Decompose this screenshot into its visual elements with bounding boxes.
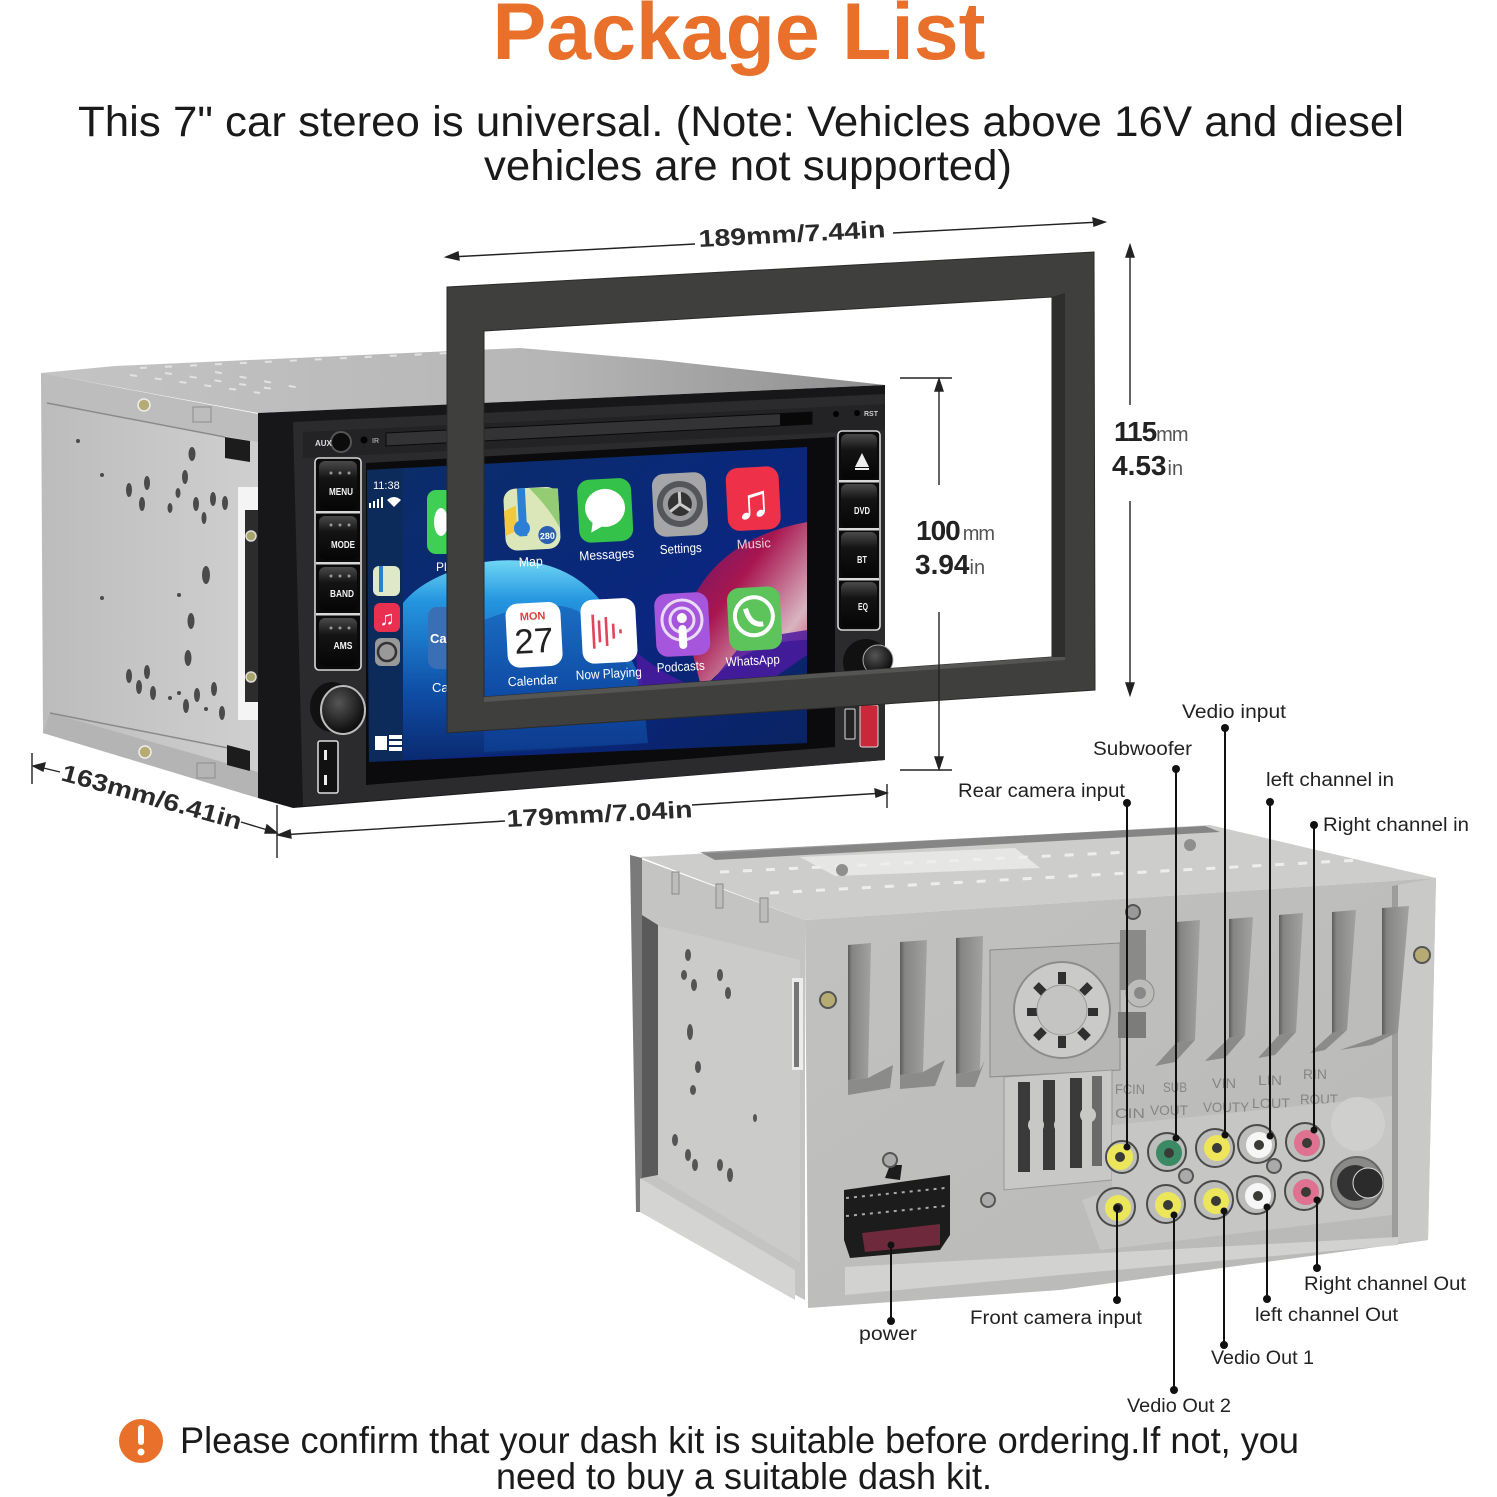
app: calendar: MON — [519, 610, 546, 624]
app: now playing — [580, 597, 638, 664]
app: calendar — [505, 601, 563, 668]
app: map: 280 — [540, 531, 555, 541]
dimension: frame height — [1112, 245, 1188, 695]
front faceplate — [258, 385, 885, 808]
vent block — [1004, 1070, 1112, 1190]
app: music — [725, 466, 781, 531]
dimension: opening height: 100mm — [916, 515, 994, 546]
app labels: Now Playing — [575, 664, 642, 683]
subtitle text block — [78, 98, 1404, 190]
rear view: stereo chassis — [630, 825, 1436, 1308]
callout: power — [859, 1242, 918, 1345]
callout: vedio input — [1182, 702, 1287, 1138]
bottom note: need to buy a suitable dash kit. — [496, 1456, 992, 1497]
dimension: frame height: 4.53in — [1112, 450, 1183, 481]
callout: vedio out 1: Vedio Out 1 — [1211, 1348, 1314, 1369]
front view: car stereo unit — [41, 348, 893, 808]
screen recess — [366, 437, 835, 785]
sidebar app icons: ♫ — [380, 608, 394, 630]
right USB port and knob base — [843, 639, 893, 747]
left control buttons: MODE — [331, 540, 355, 551]
status bar — [369, 480, 401, 508]
ventilation slots — [848, 906, 1409, 1095]
port block backing — [1082, 1096, 1392, 1250]
chassis back plate — [805, 878, 1436, 1308]
callout: subwoofer: Subwoofer — [1093, 739, 1193, 760]
unit side panel with mounting holes — [41, 373, 258, 798]
callout: right channel out: Right channel Out — [1304, 1274, 1467, 1295]
app labels — [507, 535, 780, 689]
AUX jack — [315, 410, 879, 452]
partially hidden apps: Pl — [436, 560, 447, 574]
callout: left channel in — [1266, 770, 1394, 1140]
app labels: Podcasts — [656, 658, 706, 675]
CD slot — [386, 412, 812, 446]
left control buttons: MENU — [329, 487, 353, 498]
app: messages — [577, 478, 634, 543]
callout: right channel out — [1304, 1196, 1467, 1295]
embossed port labels: RIN — [1303, 1066, 1327, 1082]
callout: rear camera input: Rear camera input — [958, 781, 1126, 802]
icon: warning — [119, 1419, 163, 1463]
carplay app icons — [498, 466, 788, 689]
callout: right channel in — [1310, 815, 1469, 1134]
screen wallpaper shapes — [403, 560, 648, 760]
callout: left channel in: left channel in — [1266, 770, 1394, 791]
AUX jack: RST — [864, 411, 879, 418]
AUX jack: AUX — [315, 439, 333, 448]
app labels: Map — [518, 553, 543, 570]
embossed port labels: VOUT — [1150, 1102, 1188, 1118]
left volume knob — [310, 682, 365, 734]
right control buttons: DVD — [854, 506, 870, 517]
unit top surface — [41, 348, 885, 413]
bottom note: Please confirm that your dash kit is suitable before ordering.If not, you — [180, 1420, 1299, 1461]
fuse — [862, 1224, 940, 1252]
dimension: unit depth: 163mm/6.41in — [58, 760, 245, 835]
right control buttons: EQ — [858, 602, 868, 613]
subtitle text block: This 7" car stereo is universal. (Note: Vehicles above 16V and diesel — [78, 98, 1404, 146]
reset knob and cap — [1331, 1097, 1385, 1209]
left control buttons — [315, 458, 361, 670]
left control buttons: BAND — [330, 589, 354, 600]
dash kit frame — [447, 252, 1095, 733]
app: settings — [651, 472, 709, 537]
callout: front camera input — [970, 1204, 1143, 1329]
status bar: 11:38 — [373, 480, 400, 492]
dimension: frame height: 115mm — [1114, 416, 1188, 447]
embossed port labels: FCIN — [1115, 1081, 1145, 1097]
app labels: Music — [736, 535, 772, 552]
callout: vedio input: Vedio input — [1182, 702, 1287, 723]
chassis top surface — [640, 825, 1436, 920]
app: podcasts — [654, 592, 711, 657]
embossed port labels: LIN — [1258, 1072, 1282, 1088]
callout: right channel in: Right channel in — [1323, 815, 1469, 836]
callout: vedio out 2: Vedio Out 2 — [1127, 1396, 1231, 1417]
left USB port — [318, 741, 338, 793]
callout: left channel out: left channel Out — [1255, 1305, 1399, 1326]
callout: power: power — [859, 1324, 918, 1345]
dimension: unit width: 179mm/7.04in — [506, 796, 693, 833]
AUX jack: IR — [372, 438, 379, 445]
embossed port labels: CIN — [1115, 1105, 1145, 1121]
partially hidden apps: Ca — [432, 680, 449, 695]
dimension: frame width: 189mm/7.44in — [698, 216, 886, 253]
embossed port labels: VOUTY — [1203, 1099, 1250, 1115]
embossed port labels: SUB — [1163, 1079, 1187, 1095]
sidebar app icons — [373, 566, 400, 666]
power harness connector — [844, 1165, 950, 1258]
callout: vedio out 2 — [1127, 1212, 1231, 1417]
dimension: unit depth — [32, 753, 277, 835]
RCA connectors — [1097, 1123, 1324, 1226]
left control buttons: AMS — [334, 641, 353, 652]
right control buttons — [838, 431, 880, 630]
chassis side panel — [630, 855, 805, 1300]
dimension: opening height: 3.94in — [915, 549, 985, 580]
embossed port labels — [1115, 1066, 1338, 1121]
grid icon — [375, 735, 402, 751]
callout: vedio out 1 — [1211, 1208, 1314, 1369]
screws — [820, 905, 1430, 1207]
port callouts — [859, 702, 1469, 1417]
dimension: unit width — [277, 784, 887, 858]
embossed port labels: VIN — [1212, 1075, 1236, 1091]
embossed port labels: ROUT — [1300, 1091, 1338, 1107]
partially hidden apps: Ca — [430, 631, 447, 646]
callout: front camera input: Front camera input — [970, 1308, 1143, 1329]
app labels: Messages — [579, 546, 635, 563]
right control buttons: BT — [857, 555, 867, 566]
app labels: Settings — [659, 540, 703, 557]
bottom note — [180, 1420, 1299, 1497]
app: music: ♫ — [734, 475, 772, 530]
app: map — [503, 486, 561, 551]
callout: rear camera input — [958, 781, 1131, 1150]
callout: left channel out — [1255, 1204, 1399, 1326]
fan housing — [990, 930, 1154, 1077]
dimension: frame width — [446, 216, 1105, 260]
app labels: Calendar — [507, 672, 559, 689]
touch screen — [367, 447, 807, 762]
callout: subwoofer — [1093, 739, 1193, 1142]
embossed port labels: LOUT — [1252, 1095, 1290, 1111]
app: whatsapp — [726, 586, 783, 652]
dimension: opening height — [900, 378, 994, 770]
app: calendar: 27 — [513, 621, 554, 662]
subtitle text block: vehicles are not supported) — [484, 142, 1012, 190]
app labels: WhatsApp — [725, 652, 780, 669]
partially hidden apps — [427, 490, 458, 695]
